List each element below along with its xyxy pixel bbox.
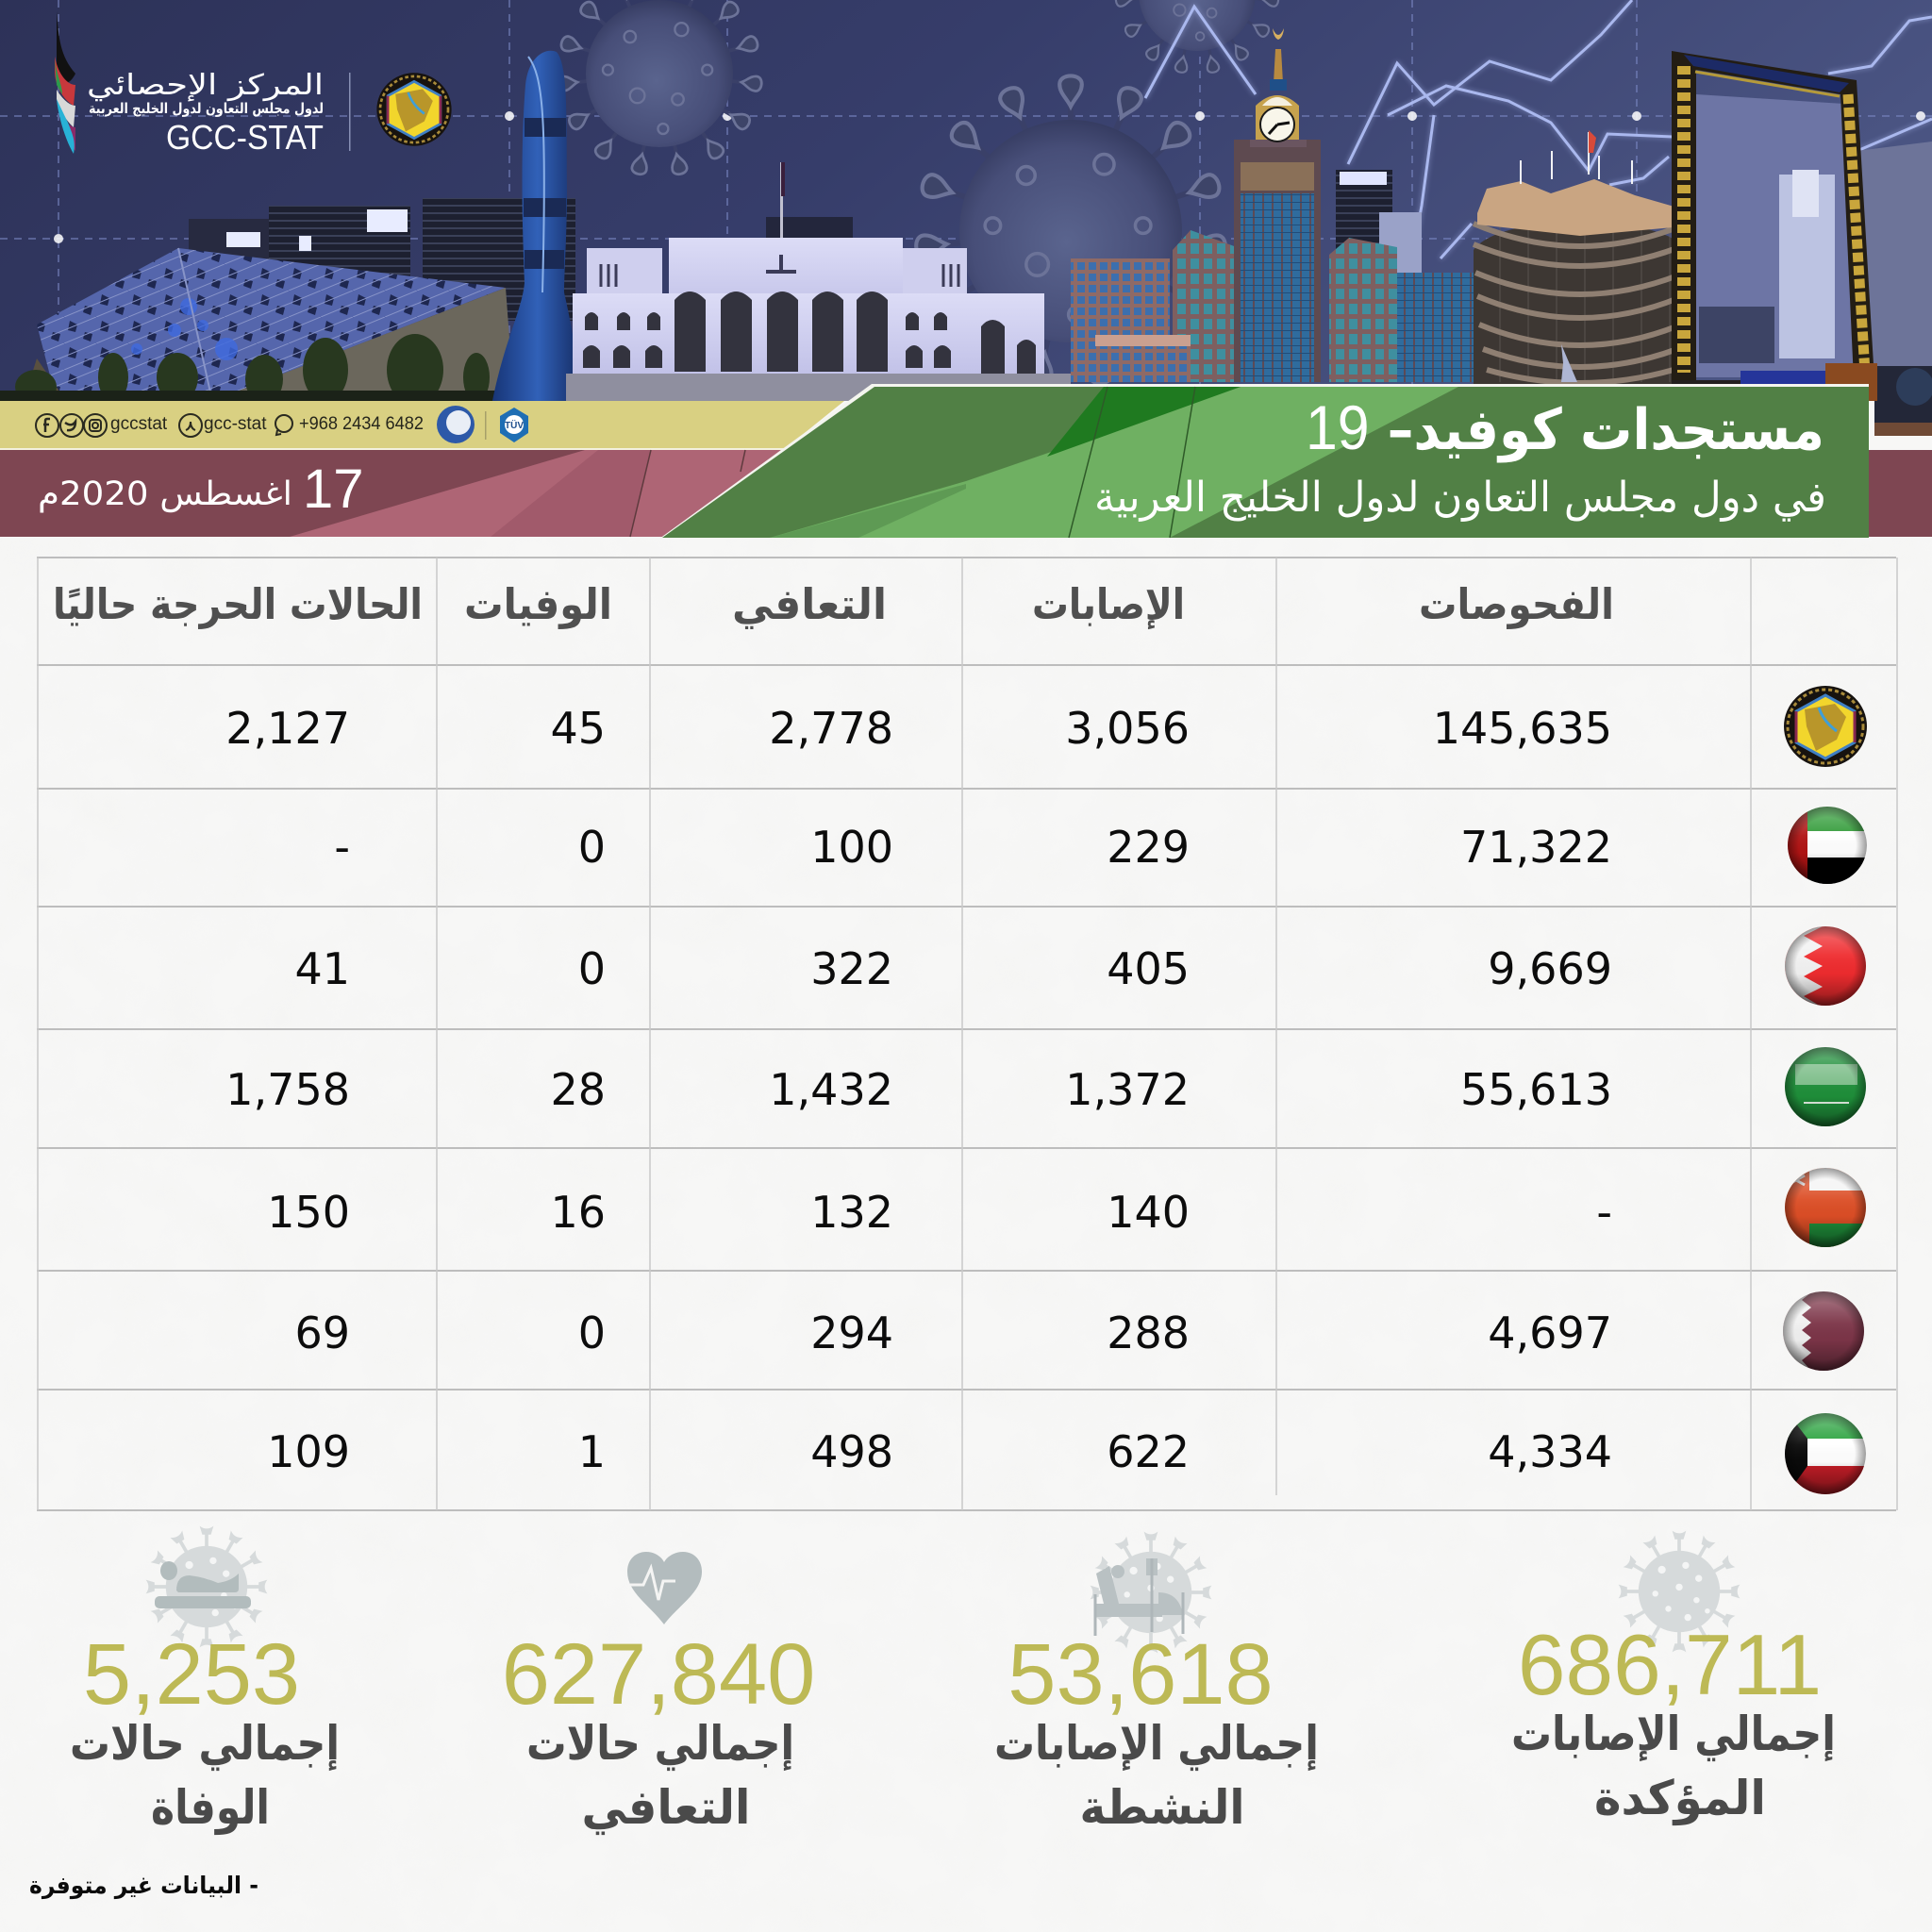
row: Oman: 132: [810, 1187, 893, 1238]
logo wordmark: GCC-STAT: [166, 118, 324, 157]
header skyline photo montage: [0, 0, 1932, 436]
logo ribbon: [55, 11, 75, 154]
row: GCC total: 2,127: [225, 703, 350, 754]
row: Oman: 140: [1107, 1187, 1190, 1238]
data table: [37, 558, 1897, 1510]
table header row: [53, 579, 1614, 629]
stat: confirmed cases: 686,711: [1518, 1618, 1822, 1713]
stat: recoveries: إجمالي حالات: [526, 1716, 794, 1772]
GCC emblem: [376, 73, 452, 146]
stat: confirmed cases: [1511, 1531, 1836, 1826]
logo wordmark: [87, 69, 324, 157]
GCC-STAT logo: [55, 11, 452, 157]
row: Oman: 16: [550, 1187, 606, 1238]
row: UAE: 0: [578, 822, 606, 873]
Oman royal opera house: [566, 162, 1071, 401]
date text: اغسطس 2020م: [38, 475, 292, 513]
table header row: الإصابات: [1032, 579, 1185, 629]
row: Kuwait: 4,334: [1488, 1426, 1612, 1477]
logo wordmark: لدول مجلس التعاون لدول الخليج العربية: [89, 100, 324, 117]
row: UAE: 71,322: [1460, 822, 1612, 873]
row: UAE: 229: [1107, 822, 1190, 873]
row: Qatar: 294: [810, 1307, 893, 1358]
stat: deaths: [70, 1526, 340, 1836]
row: Kuwait: [267, 1410, 1877, 1496]
row: Bahrain: 0: [578, 943, 606, 994]
stat: deaths: الوفاة: [151, 1780, 270, 1836]
social contact band: [0, 401, 844, 450]
social handles and phone: gcc-stat: [204, 414, 267, 434]
row: Qatar: 288: [1107, 1307, 1190, 1358]
social handles and phone: +968 2434 6482: [299, 414, 424, 434]
stat: active cases: 53,618: [1008, 1626, 1274, 1723]
virus illustrations: [557, 0, 1279, 385]
Qatar torch tower: [492, 51, 583, 401]
table header row: الحالات الحرجة حاليًا: [53, 579, 423, 629]
stat: deaths: إجمالي حالات: [70, 1716, 340, 1772]
stat: active cases: إجمالي الإصابات: [994, 1716, 1319, 1772]
row: UAE: -: [334, 822, 350, 873]
row: GCC total: 145,635: [1433, 703, 1612, 754]
row: Qatar: 69: [294, 1307, 350, 1358]
icon: heart with pulse: [627, 1552, 702, 1624]
row: Kuwait: 1: [578, 1426, 606, 1477]
row: Bahrain: 9,669: [1488, 943, 1612, 994]
row: Bahrain: 322: [810, 943, 893, 994]
date ribbon: [0, 450, 1932, 537]
background night buildings: [189, 94, 1932, 436]
row: Saudi Arabia: 1,758: [225, 1064, 350, 1115]
certification badges: TÜV: [505, 419, 524, 431]
row: GCC total: 3,056: [1065, 703, 1190, 754]
round building with tent roof: [1474, 130, 1687, 396]
stat: recoveries: التعافي: [581, 1780, 751, 1835]
row: Qatar: 4,697: [1488, 1307, 1612, 1358]
table header row: الفحوصات: [1419, 579, 1614, 629]
row: Oman: [267, 1165, 1877, 1250]
Kuwait opera building: [0, 248, 514, 406]
row: Bahrain: [296, 926, 1866, 1006]
date text: 17: [303, 458, 364, 520]
row: Saudi Arabia: 55,613: [1460, 1064, 1612, 1115]
row: Saudi Arabia: 28: [550, 1064, 606, 1115]
stat: confirmed cases: المؤكدة: [1594, 1771, 1766, 1826]
row: Qatar: [294, 1288, 1877, 1374]
row: Bahrain: 41: [294, 943, 350, 994]
social media icons: [36, 414, 292, 437]
row: Oman: 150: [267, 1187, 350, 1238]
logo wordmark: المركز الإحصائي: [87, 69, 324, 102]
row: Kuwait: 498: [810, 1426, 893, 1477]
stat: recoveries: [502, 1552, 815, 1835]
row: Bahrain: 405: [1107, 943, 1190, 994]
table grid: [37, 558, 1896, 1510]
row: UAE: 100: [810, 822, 893, 873]
stat: active cases: [994, 1532, 1319, 1835]
row: Qatar: 0: [578, 1307, 606, 1358]
icon: virus: [1619, 1531, 1740, 1652]
row: Oman: -: [1596, 1187, 1612, 1238]
row: GCC total: 45: [550, 703, 606, 754]
title text: مستجدات كوفيد– 19: [1306, 392, 1824, 463]
stat: deaths: 5,253: [83, 1626, 300, 1723]
footnote: - البيانات غير متوفرة: [29, 1872, 258, 1900]
social handles and phone: [110, 414, 424, 434]
row: Kuwait: 622: [1107, 1426, 1190, 1477]
row: GCC total: [225, 686, 1867, 767]
table header row: التعافي: [732, 579, 887, 629]
subtitle text: في دول مجلس التعاون لدول الخليج العربية: [1094, 474, 1826, 522]
Dubai frame: [1672, 51, 1877, 401]
stat: recoveries: 627,840: [502, 1626, 815, 1723]
row: UAE: [334, 802, 1877, 887]
row: Kuwait: 109: [267, 1426, 350, 1477]
row: Saudi Arabia: [230, 1047, 1866, 1126]
social handles and phone: gccstat: [110, 414, 168, 434]
row: GCC total: 2,778: [769, 703, 893, 754]
row: Saudi Arabia: 1,432: [769, 1064, 893, 1115]
table header row: الوفيات: [464, 579, 612, 629]
row: Saudi Arabia: 1,372: [1065, 1064, 1190, 1115]
icon: patient on bed with drip: [1091, 1532, 1211, 1653]
title banner: [659, 384, 1932, 539]
Makkah clock tower with flanking towers: [1071, 28, 1474, 382]
rising chart lines: [1145, 0, 1932, 304]
icon: patient lying on bed: [146, 1526, 267, 1647]
certification badges: [437, 406, 528, 443]
stat: confirmed cases: إجمالي الإصابات: [1511, 1707, 1836, 1762]
stat: active cases: النشطة: [1079, 1780, 1245, 1835]
date text: [38, 458, 364, 520]
